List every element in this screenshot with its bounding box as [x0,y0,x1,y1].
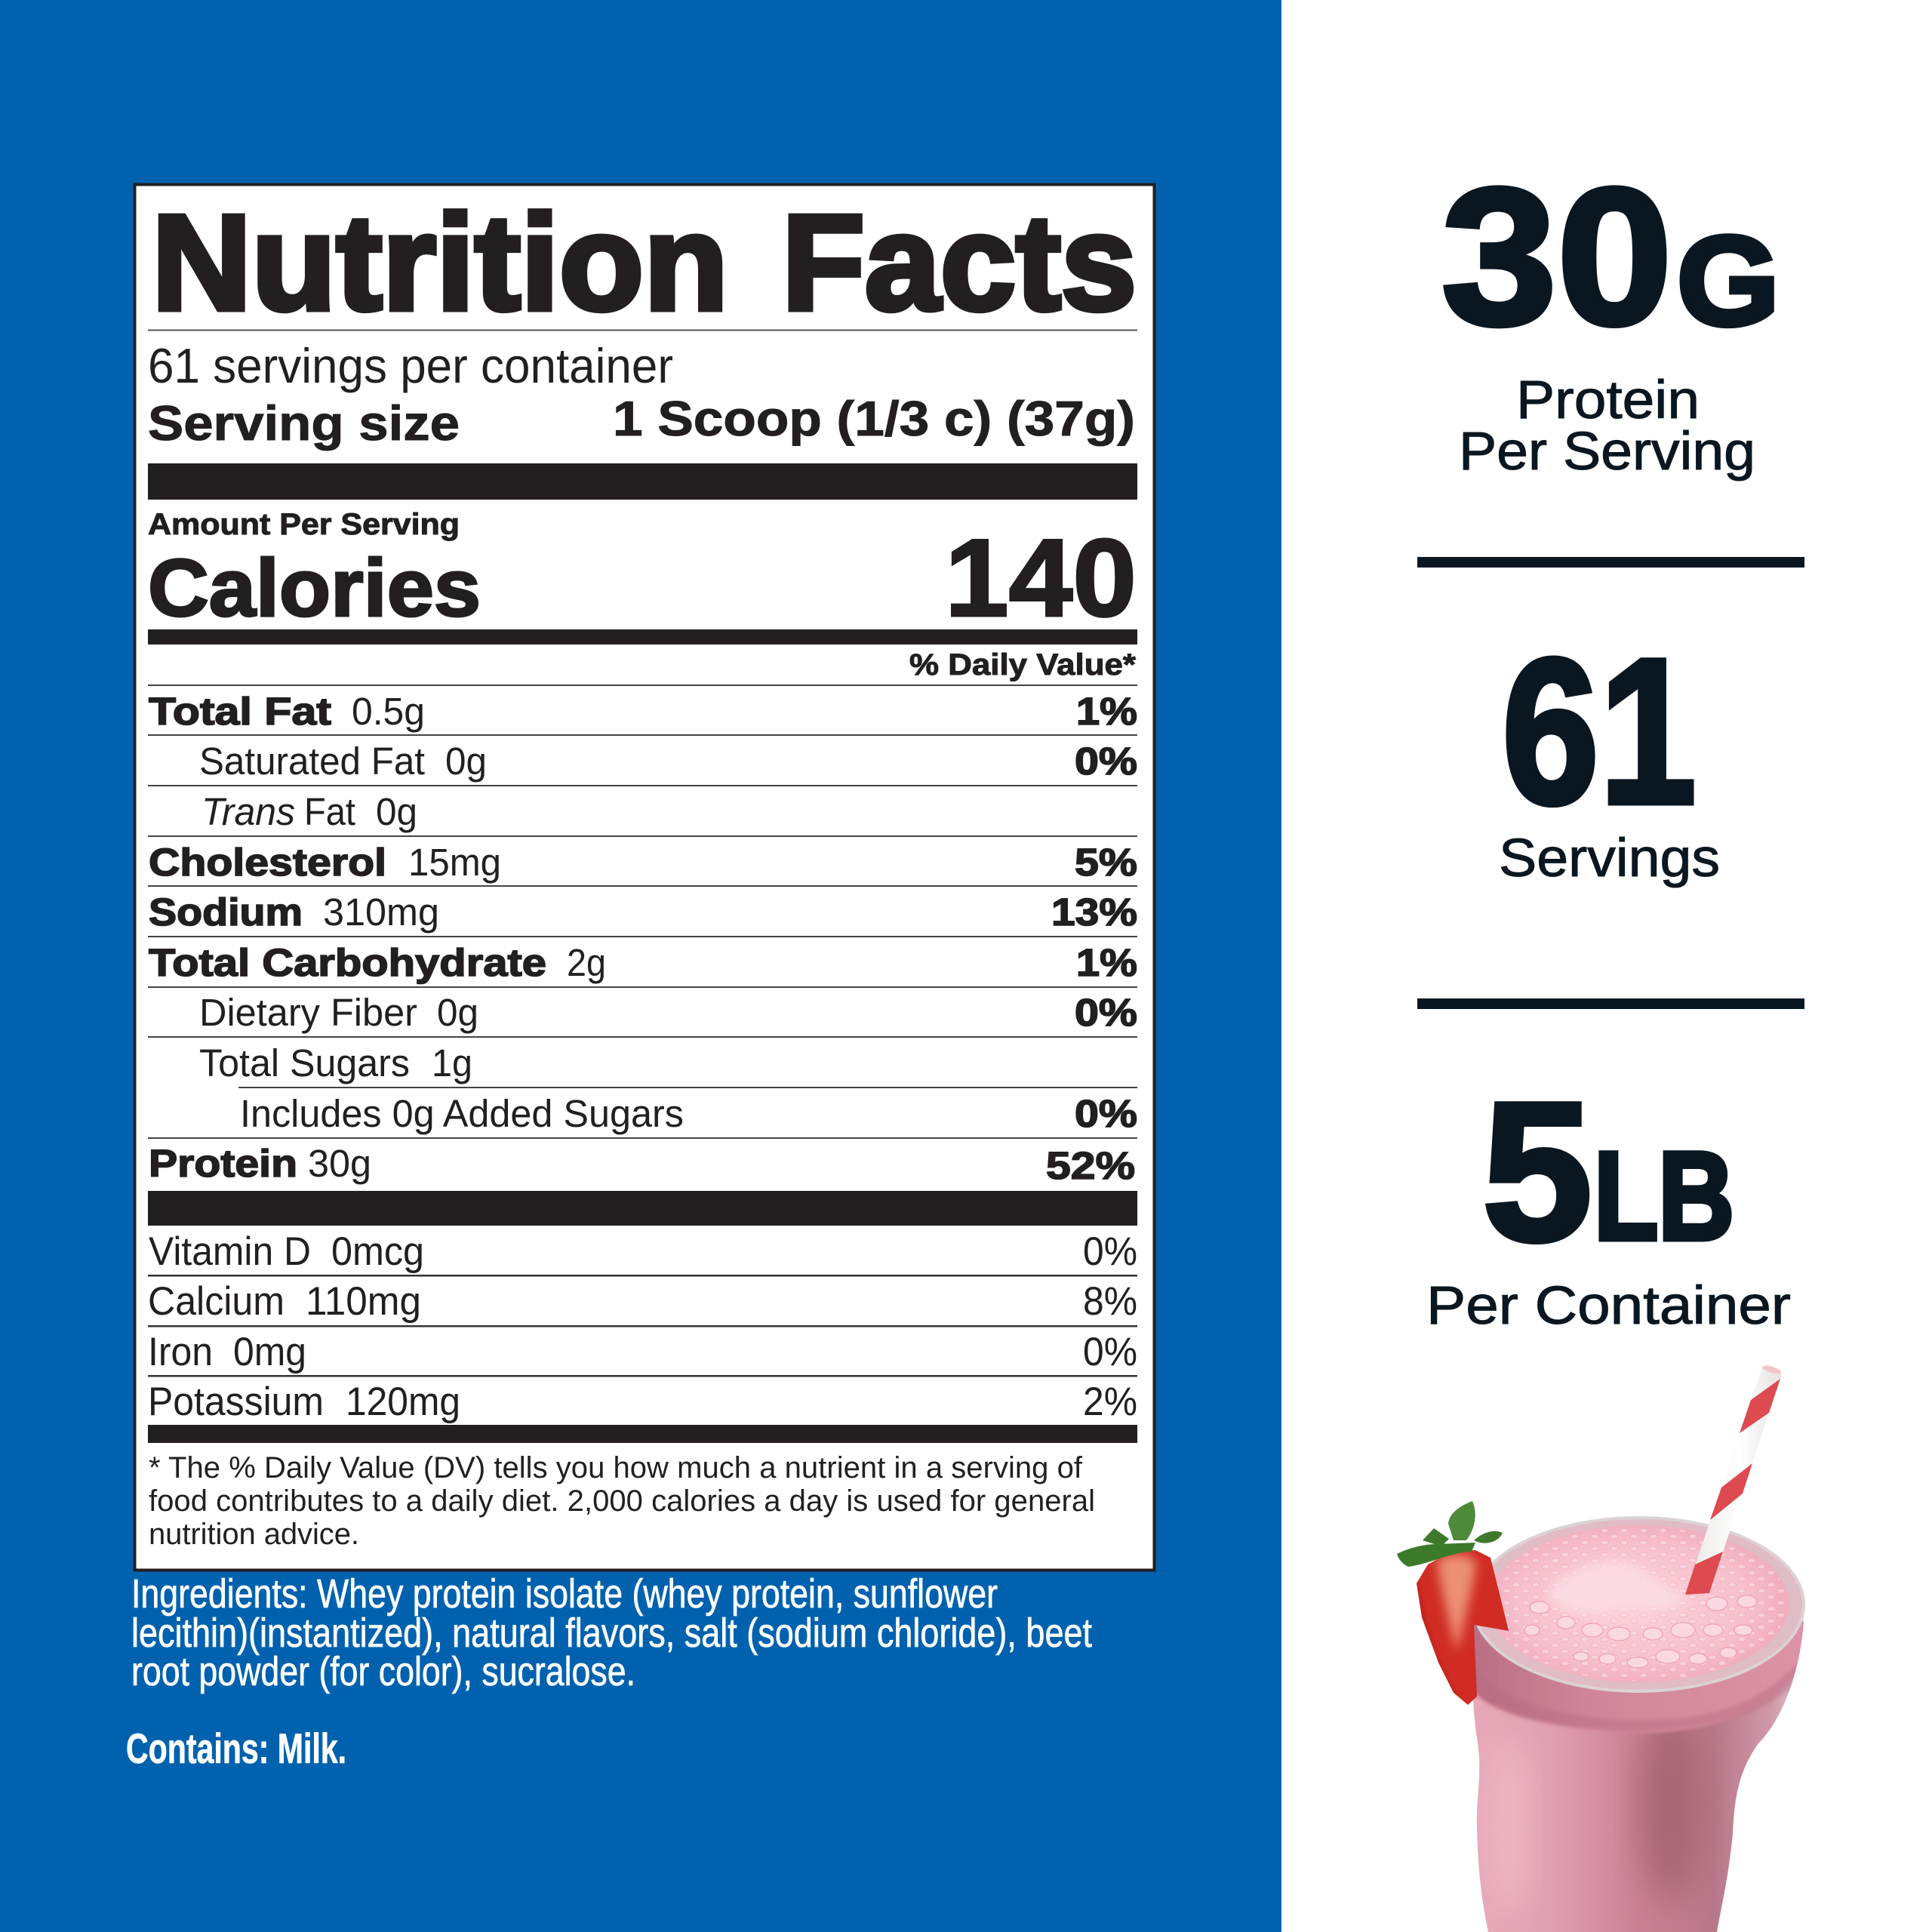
white right column background [1281,0,1932,1932]
stat: 30g protein [1441,147,1780,481]
foam surface [1488,1525,1789,1682]
foam highlight [1547,1561,1690,1614]
row: potassium [148,1380,1137,1424]
row: iron: 0mg [233,1330,306,1374]
row: saturated fat: 0g [445,740,487,783]
fine foam texture [1490,1527,1787,1681]
row: potassium: 120mg [346,1380,460,1424]
row: trans fat: Fat [304,790,355,833]
glass body [1464,1615,1811,1932]
blue background panel [0,0,1281,1932]
row: potassium: 2% [1083,1380,1137,1424]
striped straw [1685,1364,1783,1595]
footnote [149,1451,1095,1551]
stat: 30g protein: G [1677,210,1780,352]
stat: 5lb per container: Per Container [1426,1276,1791,1336]
row: sodium: 13% [1051,891,1137,934]
row: protein: 52% [1046,1144,1135,1187]
row: cholesterol: Cholesterol [149,841,386,884]
footnote: food contributes to a daily diet. 2,000 calories a day is used for general [149,1484,1095,1518]
row: dietary fiber: 0% [1075,991,1137,1034]
row: sodium: Sodium [149,891,303,934]
row: saturated fat: 0% [1075,740,1137,783]
strawberry [1397,1501,1509,1705]
row: trans fat: 0g [376,790,417,833]
ingredients text: lecithin)(instantized), natural flavors, salt (sodium chloride), beet [131,1611,1092,1656]
ingredients text: Ingredients: Whey protein isolate (whey protein, sunflower [131,1571,998,1617]
row: added sugars [240,1092,1137,1135]
calories: Calories [148,542,481,633]
leaves [1448,1501,1475,1540]
servings per container: 61 servings per container [148,338,673,393]
row: calcium: 8% [1083,1279,1137,1324]
row rules [148,685,1137,1139]
panel: nutrition facts label [134,184,1155,1570]
illustration: strawberry milkshake [1397,1364,1811,1932]
stat: 30g protein: 30 [1441,147,1672,365]
row: total sugars: Total Sugars [199,1041,410,1084]
row: calcium [148,1279,1137,1324]
row: total sugars: 1g [432,1041,472,1084]
row: total fat: 1% [1076,690,1137,733]
daily value header: % Daily Value* [909,648,1136,681]
row: dietary fiber: 0g [437,991,478,1034]
row: vitamin d: 0mcg [331,1229,424,1274]
glass collar [1464,1615,1811,1733]
serving size: Serving size [148,395,460,451]
row: calcium: Calcium [148,1279,285,1324]
row: vitamin d: 0% [1083,1229,1137,1274]
calories [148,516,1137,639]
row: dietary fiber: Dietary Fiber [199,991,417,1034]
stat: 30g protein: Protein [1516,371,1700,430]
calories: 140 [945,516,1137,639]
footnote: * The % Daily Value (DV) tells you how much a nutrient in a serving of [149,1451,1083,1484]
row: calcium: 110mg [306,1279,421,1324]
vitamin rules [148,1275,1137,1377]
row: saturated fat [199,740,1137,783]
heading: Nutrition Facts [152,187,1137,339]
row: sodium: 310mg [323,891,439,934]
row: added sugars: 0% [1075,1092,1137,1135]
stat: 61 servings: Servings [1499,829,1720,888]
row: vitamin d [149,1229,1137,1274]
heading: Nutrition Facts: Nutrition [152,187,728,339]
ingredients text: root powder (for color), sucralose. [131,1649,635,1694]
stat: 5lb per container: LB [1594,1127,1734,1266]
row: total carbohydrate: 2g [567,941,606,984]
row: total carbohydrate: Total Carbohydrate [149,941,546,984]
foam bubbles [1524,1595,1757,1668]
serving size: 1 Scoop (1/3 c) (37g) [613,391,1135,446]
row: cholesterol: 5% [1075,841,1137,884]
row: saturated fat: Saturated Fat [199,740,425,783]
row: trans fat [202,790,417,833]
row: total fat [149,690,1137,733]
glass rim [1473,1518,1804,1691]
row: vitamin d: Vitamin D [149,1229,311,1274]
row: potassium: Potassium [148,1380,324,1424]
contains allergen: Contains: Milk. [126,1724,346,1772]
row: iron: 0% [1083,1330,1137,1374]
stat: 5lb per container: 5 [1482,1061,1592,1282]
row: dietary fiber [199,991,1137,1034]
serving size [148,391,1135,451]
row: protein [149,1142,1135,1187]
amount per serving: Amount Per Serving [148,508,460,541]
ingredients text [131,1571,1092,1694]
stat: 61 servings: 61 [1502,616,1697,848]
row: total fat: 0.5g [352,690,425,733]
row: cholesterol [149,841,1137,884]
row: protein: Protein [149,1142,297,1185]
row: total carbohydrate [149,941,1137,984]
row: total fat: Total Fat [149,690,331,733]
heading: Nutrition Facts: Facts [782,187,1137,339]
footnote: nutrition advice. [149,1518,359,1551]
row: iron [148,1330,1137,1374]
row: total carbohydrate: 1% [1076,941,1137,984]
row: cholesterol: 15mg [408,841,501,884]
stat: 5lb per container [1426,1061,1791,1336]
row: protein: 30g [308,1142,371,1185]
row: iron: Iron [148,1330,213,1374]
row: added sugars: Includes 0g Added Sugars [240,1092,684,1135]
row: sodium [149,891,1137,934]
row: trans fat: Trans [202,790,295,833]
stat: 30g protein: Per Serving [1459,422,1755,481]
